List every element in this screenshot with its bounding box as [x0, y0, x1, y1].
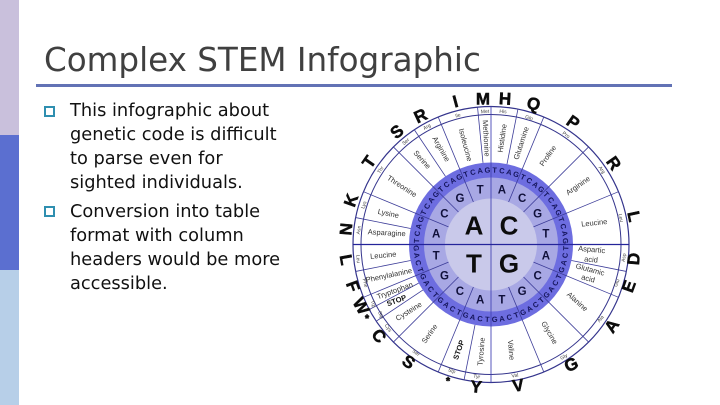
- codon letter ring: A: [531, 179, 541, 190]
- codon letter ring: [411, 165, 571, 324]
- amino acid names: Serine: [411, 149, 433, 171]
- amino acid names: STOP: [451, 339, 467, 361]
- three letter abbreviations: Trp: [369, 300, 377, 309]
- second base ring letters: T: [498, 294, 505, 306]
- codon letter ring: G: [418, 272, 429, 281]
- first base centre letters: G: [499, 248, 519, 278]
- codon letter ring: A: [441, 299, 452, 310]
- codon letter ring: A: [412, 252, 422, 259]
- second base ring letters: T: [433, 250, 440, 262]
- codon letter ring: G: [518, 307, 528, 318]
- second base ring letters: C: [456, 286, 464, 298]
- codon letter ring: A: [546, 284, 557, 294]
- codon letter ring: T: [419, 208, 429, 217]
- codon letter ring: C: [422, 201, 433, 211]
- codon letter ring: C: [412, 230, 422, 237]
- outer single letter codes: Q: [525, 93, 542, 115]
- codon letter ring: A: [525, 303, 535, 314]
- three letter abbreviations: Gly: [559, 353, 569, 362]
- codon letter ring: A: [550, 202, 560, 211]
- three letter abbreviations: Asn: [356, 225, 363, 235]
- codon letter ring: G: [536, 184, 546, 195]
- codon letter ring: T: [541, 190, 551, 199]
- bullet two text: format with column: [70, 225, 244, 246]
- codon letter ring: G: [455, 172, 464, 182]
- three letter abbreviations: Glu: [613, 278, 622, 288]
- codon letter ring: T: [492, 165, 498, 175]
- three letter abbreviations: Arg: [597, 165, 606, 175]
- codon letter ring: A: [421, 278, 432, 288]
- second base ring letters: G: [533, 208, 542, 220]
- codon letter ring: T: [415, 266, 426, 274]
- codon letter ring: C: [531, 299, 541, 310]
- amino acid names: Leucine: [370, 250, 397, 261]
- second base ring letters: T: [542, 229, 549, 241]
- three letter abbreviations: [354, 109, 628, 381]
- outer single letter codes: R: [411, 105, 430, 127]
- three letter abbreviations: His: [499, 109, 507, 115]
- codon letter ring: T: [485, 315, 490, 324]
- codon letter ring: G: [416, 215, 426, 224]
- codon letter ring: C: [477, 314, 484, 324]
- codon letter ring: G: [541, 290, 552, 300]
- codon letter ring: T: [462, 169, 470, 179]
- second base ring letters: T: [477, 185, 484, 197]
- codon letter ring: C: [499, 166, 506, 176]
- amino acid names: Methionine: [481, 120, 492, 157]
- three letter abbreviations: Cys: [383, 323, 393, 334]
- second base ring letters: C: [533, 271, 542, 283]
- outer single letter codes: R: [602, 153, 625, 174]
- second base ring letters: G: [440, 271, 449, 283]
- codon letter ring: A: [426, 195, 437, 205]
- codon letter ring: C: [525, 175, 534, 186]
- outer single letter codes: K: [340, 191, 363, 209]
- amino acid names: Arginine: [430, 135, 452, 163]
- amino acid names: Alanine: [565, 290, 590, 313]
- bullet two text: accessible.: [70, 273, 168, 294]
- amino acid names: Isoleucine: [457, 127, 474, 162]
- three letter abbreviations: Val: [511, 372, 519, 380]
- outer single letter codes: A: [601, 316, 623, 337]
- outer single letter codes: L: [336, 253, 356, 267]
- first base centre letters: C: [500, 210, 519, 240]
- title rule: [36, 84, 672, 87]
- codon letter ring: G: [553, 208, 564, 217]
- codon letter ring: G: [431, 189, 441, 200]
- codon letter ring: A: [477, 166, 484, 176]
- bullet one text: to parse even for: [70, 148, 223, 169]
- outer single letter codes: S: [398, 351, 419, 373]
- codon letter ring: A: [560, 230, 570, 238]
- second base ring letters: G: [518, 286, 527, 298]
- outer single letter codes: Y: [470, 377, 483, 397]
- bullet one text: genetic code is difficult: [70, 124, 277, 145]
- three letter abbreviations: Stp: [447, 367, 456, 375]
- bullet two icon: [44, 206, 55, 217]
- three letter abbreviations: Ser: [411, 349, 421, 358]
- three letter abbreviations: Leu: [617, 213, 624, 223]
- codon letter ring: T: [431, 290, 441, 300]
- second base ring letters: A: [432, 229, 440, 241]
- outer single letter codes: F: [342, 278, 363, 294]
- three letter abbreviations: Gln: [524, 114, 534, 122]
- amino acid names: Glutamine: [512, 125, 531, 161]
- codon letter ring: G: [561, 238, 570, 244]
- bullet two text: headers would be more: [70, 249, 280, 270]
- outer single letter codes: W: [349, 294, 374, 319]
- codon letter ring: C: [442, 179, 452, 190]
- outer single letter codes: D: [624, 252, 644, 266]
- three letter abbreviations: Arg: [422, 123, 432, 132]
- codon letter ring: C: [546, 195, 556, 205]
- amino acid names: Phenylalanine: [365, 266, 413, 284]
- amino acid names: acid: [580, 272, 596, 285]
- first base centre letters: A: [465, 210, 484, 240]
- second base ring letters: C: [518, 193, 526, 205]
- bullet one text: [70, 100, 277, 193]
- codon letter ring: T: [556, 216, 566, 223]
- three letter abbreviations: Phe: [361, 278, 369, 288]
- codon letter ring: G: [512, 169, 521, 180]
- amino acid names: Leucine: [581, 217, 608, 229]
- outer single letter codes: *: [446, 376, 451, 388]
- first base centre letters: T: [466, 248, 482, 278]
- second base ring letters: C: [440, 208, 449, 220]
- second base ring letters: A: [542, 250, 550, 262]
- outer single letter codes: T: [358, 152, 380, 172]
- outer single letter codes: N: [336, 222, 356, 236]
- codon letter ring: C: [426, 284, 436, 295]
- codon letter ring: G: [461, 310, 470, 320]
- amino acid names: Cysteine: [394, 300, 423, 323]
- codon letter ring: A: [559, 258, 569, 266]
- wheel rings: [353, 106, 629, 382]
- outer single letter codes: *: [365, 313, 370, 325]
- amino acid names: Proline: [537, 144, 558, 168]
- amino acid names: Aspartic: [578, 244, 606, 255]
- codon letter ring: G: [435, 295, 446, 305]
- outer single letter codes: H: [498, 89, 512, 109]
- amino acid names: Asparagine: [368, 227, 406, 238]
- outer single letter codes: S: [387, 121, 407, 143]
- second base ring letters: [432, 185, 550, 306]
- codon letter ring: T: [513, 310, 520, 320]
- outer single letter codes: E: [618, 278, 640, 295]
- codon letter ring: T: [519, 172, 527, 182]
- three letter abbreviations: Ala: [596, 314, 606, 324]
- codon letter ring: T: [537, 295, 546, 305]
- codon letter ring: A: [448, 175, 458, 186]
- amino acid names: Glutamic: [575, 261, 606, 278]
- outer single letter codes: C: [368, 325, 390, 347]
- codon letter ring: G: [492, 315, 498, 324]
- side accent bar: [0, 0, 19, 405]
- outer single letter codes: I: [451, 92, 460, 112]
- codon letter ring: A: [505, 167, 513, 177]
- three letter abbreviations: Pro: [561, 131, 571, 140]
- amino acid names: Tryptophan: [376, 280, 414, 301]
- codon letter ring: C: [469, 167, 477, 177]
- codon letter ring: C: [506, 312, 514, 322]
- codon letter ring: C: [560, 252, 570, 259]
- codon letter ring: T: [455, 307, 463, 318]
- codon letter ring: G: [411, 245, 421, 251]
- three letter abbreviations: Tyr: [473, 374, 481, 381]
- codon letter ring: C: [448, 304, 458, 314]
- codon letter ring: A: [469, 312, 477, 322]
- bullet one text: This infographic about: [70, 100, 269, 121]
- codon letter ring: T: [561, 245, 571, 251]
- three letter abbreviations: Leu: [354, 255, 361, 264]
- codon letter ring: T: [412, 238, 421, 243]
- three letter abbreviations: Thr: [376, 165, 386, 175]
- codon letter ring: A: [414, 222, 424, 230]
- second base ring letters: G: [455, 193, 464, 205]
- codon letter ring: A: [499, 314, 506, 324]
- second base ring letters: A: [476, 294, 484, 306]
- codon letter ring: C: [550, 278, 561, 288]
- amino acid names: Lysine: [377, 207, 400, 220]
- bullet one icon: [44, 106, 55, 117]
- amino acid names: Histidine: [496, 123, 509, 153]
- outer single letter codes: M: [476, 89, 490, 108]
- codon letter ring: T: [554, 272, 564, 281]
- three letter abbreviations: Lys: [360, 200, 369, 210]
- codon letter ring: C: [558, 223, 568, 231]
- title: Complex STEM Infographic: [44, 41, 481, 79]
- codon letter ring: G: [556, 265, 567, 274]
- bullet one text: sighted individuals.: [70, 172, 243, 193]
- amino acid names: STOP: [385, 293, 408, 308]
- outer single letter codes: V: [511, 375, 526, 396]
- amino acid names: Arginine: [564, 174, 592, 197]
- amino acid names: Valine: [506, 339, 517, 360]
- outer single letter codes: G: [561, 353, 581, 376]
- second base ring letters: A: [498, 185, 506, 197]
- bullet two text: [70, 201, 280, 294]
- outer single letter codes: P: [563, 111, 583, 134]
- three letter abbreviations: Ile: [455, 112, 462, 120]
- codon letter ring: T: [436, 184, 446, 194]
- codon letter ring: G: [484, 165, 491, 175]
- genetic code wheel: [336, 89, 644, 397]
- bullet two text: Conversion into table: [70, 201, 260, 222]
- amino acid names: Tyrosine: [475, 337, 487, 366]
- outer single letter codes: L: [623, 209, 644, 224]
- amino acid names: Glycine: [539, 320, 560, 346]
- amino acid names: Threonine: [385, 173, 419, 199]
- three letter abbreviations: Stp: [376, 310, 385, 320]
- amino acid names: Serine: [420, 322, 439, 345]
- three letter abbreviations: Asp: [621, 253, 628, 262]
- three letter abbreviations: Met: [481, 109, 490, 115]
- three letter abbreviations: Ser: [401, 137, 411, 147]
- first base centre letters: [465, 210, 519, 278]
- codon letter ring: C: [413, 259, 423, 267]
- outer single letter codes: [336, 89, 644, 397]
- amino acid names: [365, 120, 608, 366]
- amino acid names: acid: [584, 254, 598, 265]
